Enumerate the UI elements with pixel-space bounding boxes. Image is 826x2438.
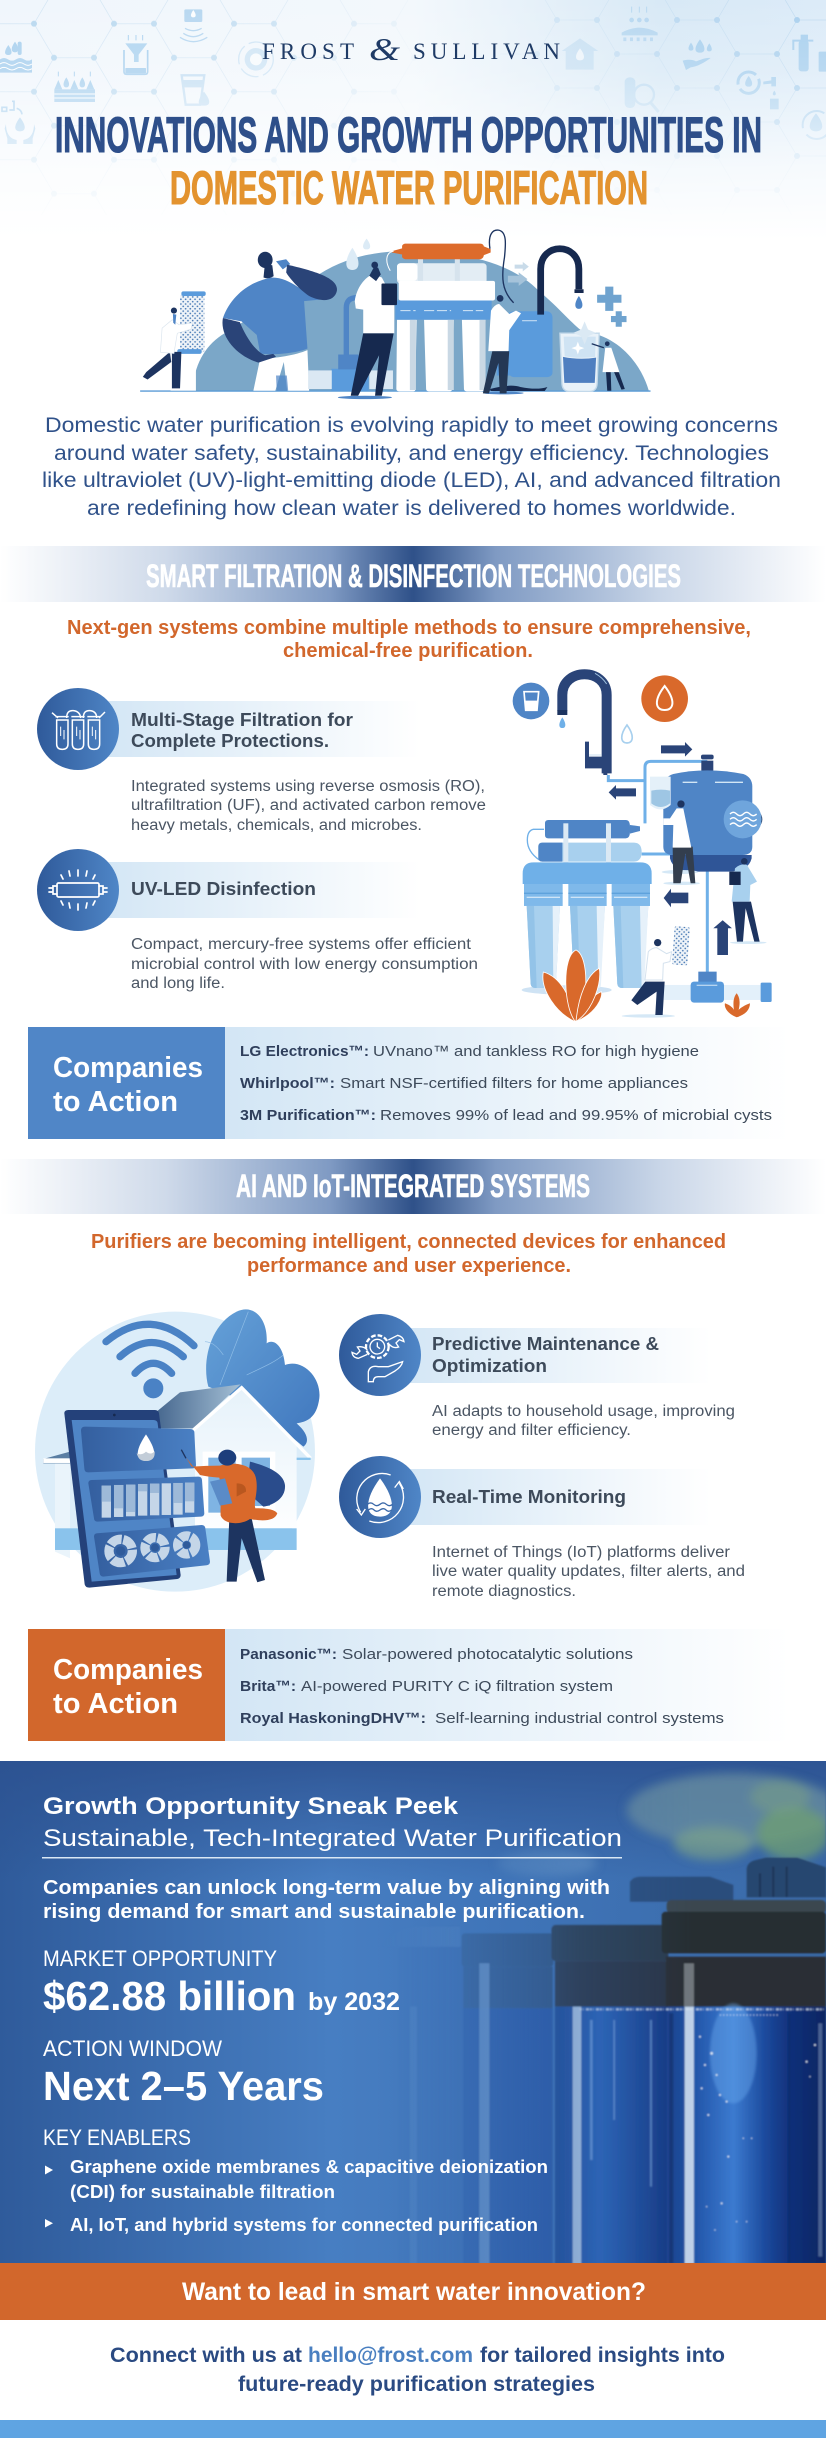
carbon filter cartridge: [171, 291, 206, 391]
scientist holding cartridge: [622, 926, 690, 1018]
glass of water: [560, 321, 599, 391]
drop badge: [641, 675, 688, 722]
feature: real-time monitoring: live water quality updates, filter alerts, and: [432, 1563, 745, 1580]
companies to action: AI and IoT: AI-powered PURITY C iQ filtration system: [301, 1678, 613, 1695]
scientist with cartridge: [143, 308, 193, 388]
house: [43, 1384, 311, 1558]
woman pointing at phone: [181, 1450, 285, 1582]
flow arrows: [609, 742, 732, 955]
hero illustration: people and water purifier: [140, 230, 651, 399]
companies to action: filtration: [28, 1027, 790, 1139]
scientist at tank: [662, 800, 700, 885]
leaf shape: [206, 1309, 320, 1447]
companies to action: filtration: UVnano™ and tankless RO for high hygiene: [373, 1043, 699, 1060]
panel heading: Growth Opportunity Sneak Peek: [43, 1793, 459, 1820]
feature: multi-stage filtration: Complete Protections.: [131, 731, 329, 751]
three-stage filter housing: [522, 862, 652, 995]
action window: Next 2–5 Years: [43, 2063, 324, 2109]
panel summary: rising demand for smart and sustainable purification.: [43, 1901, 585, 1923]
flow arrows: [508, 262, 529, 286]
front filter: [662, 1857, 826, 2264]
market opportunity: [43, 1946, 400, 2019]
panel summary: Companies can unlock long-term value by aligning with: [43, 1877, 610, 1899]
key enablers: AI, IoT, and hybrid systems for connected purification: [70, 2215, 538, 2235]
companies to action: filtration: LG Electronics™:: [240, 1043, 369, 1060]
companies to action: AI and IoT: [28, 1629, 790, 1741]
water drops: [346, 239, 370, 270]
call to action banner: Want to lead in smart water innovation?: [182, 2278, 646, 2306]
background icons: right water symbols: [562, 7, 826, 139]
feature: multi-stage filtration: Integrated systems using reverse osmosis (RO),: [131, 778, 485, 795]
feature: UV-LED disinfection: and long life.: [131, 975, 225, 992]
icon: UV lamp: [37, 849, 119, 931]
wifi symbol: [106, 1324, 194, 1393]
contact text: for tailored insights into: [480, 2344, 725, 2367]
companies to action: filtration: 3M Purification™:: [240, 1107, 376, 1124]
footer bar: [0, 2420, 826, 2438]
growth opportunity panel: [0, 1761, 826, 2267]
market opportunity: by 2032: [308, 1988, 400, 2016]
third filter: [552, 1877, 733, 2267]
action window: [43, 2036, 324, 2109]
companies to action: AI and IoT: Panasonic™:: [240, 1646, 337, 1663]
scientist with tube: [483, 295, 521, 393]
doctor with clipboard: [351, 262, 397, 396]
feature: multi-stage filtration: ultrafiltration (UF), and activated carbon remove: [131, 797, 486, 814]
feature: real-time monitoring: Real-Time Monitoring: [432, 1487, 626, 1507]
faucet and tank: [490, 249, 584, 391]
market opportunity: MARKET OPPORTUNITY: [43, 1946, 277, 1971]
companies to action: AI and IoT: Brita™:: [240, 1678, 296, 1695]
photo: water filter housings: [461, 1770, 826, 2263]
tubing: [489, 230, 514, 303]
label box: [28, 1027, 225, 1139]
panel summary: [43, 1877, 610, 1923]
subheading: purifiers: Purifiers are becoming intelligent, connected devices for enhanced: [91, 1230, 726, 1253]
key enablers: KEY ENABLERS: [43, 2125, 191, 2150]
panel heading: [42, 1793, 622, 1858]
contact text: hello@frost.com: [308, 2344, 473, 2367]
market opportunity: $62.88 billion: [43, 1973, 296, 2019]
intro paragraph: around water safety, sustainability, and energy efficiency. Technologies: [54, 441, 769, 465]
contact text: [110, 2344, 725, 2396]
intro paragraph: Domestic water purification is evolving rapidly to meet growing concerns: [45, 413, 778, 437]
purifier system illustration: [513, 673, 772, 1022]
intro paragraph: [42, 413, 781, 520]
feature: real-time monitoring: [339, 1456, 745, 1600]
feature: predictive maintenance: energy and filter efficiency.: [432, 1422, 631, 1439]
feature: multi-stage filtration: [37, 688, 486, 834]
companies to action: filtration: Whirlpool™:: [240, 1075, 335, 1092]
purifier unit with three tubes: [392, 244, 495, 391]
water pipes: [527, 761, 707, 973]
small scientist by glass: [592, 341, 625, 391]
second filter: [462, 1933, 553, 2267]
icon: gear wrench hand: [339, 1314, 421, 1396]
logo: Frost & Sullivan: &: [369, 31, 400, 67]
logo: Frost & Sullivan: FROST: [262, 39, 354, 64]
icon: filter tubes: [37, 688, 119, 770]
man drinking water: [222, 252, 337, 391]
feature: real-time monitoring: Internet of Things (IoT) platforms deliver: [432, 1544, 730, 1561]
logo: Frost & Sullivan: [262, 31, 560, 67]
label box: to Action: [53, 1688, 178, 1720]
smart home illustration: [35, 1309, 320, 1592]
label box: [28, 1629, 225, 1741]
supply boxes: [308, 355, 393, 391]
feature: UV-LED disinfection: [37, 849, 478, 992]
feature: UV-LED disinfection: UV-LED Disinfection: [131, 879, 316, 899]
feature: predictive maintenance: Predictive Maintenance &: [432, 1334, 659, 1354]
feature: predictive maintenance: AI adapts to household usage, improving: [432, 1403, 735, 1420]
feature: predictive maintenance: Optimization: [432, 1356, 547, 1376]
companies to action: AI and IoT: Royal HaskoningDHV™:: [240, 1710, 426, 1727]
section banner: AI and IoT: AI AND IoT-INTEGRATED SYSTEMS: [236, 1168, 590, 1204]
label box: Companies: [53, 1654, 203, 1686]
orange plant: [543, 950, 602, 1022]
action window: ACTION WINDOW: [43, 2036, 222, 2061]
section banner: smart filtration: [0, 546, 826, 602]
companies to action: filtration: Smart NSF-certified filters for home appliances: [340, 1075, 688, 1092]
smartphone dashboard: [64, 1410, 210, 1588]
logo: Frost & Sullivan: SULLIVAN: [413, 39, 560, 64]
key enablers: Graphene oxide membranes & capacitive deionization: [70, 2157, 548, 2177]
pump and base pipe: [663, 972, 772, 1017]
faucet: [557, 673, 632, 775]
storage tank: [650, 755, 762, 872]
water surface foam and bubbles: [580, 2009, 826, 2231]
call to action banner: [0, 2263, 826, 2320]
label box: to Action: [53, 1086, 178, 1118]
feature: multi-stage filtration: heavy metals, chemicals, and microbes.: [131, 817, 422, 834]
glass badge: [513, 683, 549, 719]
background icons: left water symbols: [0, 9, 273, 144]
contact text: Connect with us at: [110, 2344, 302, 2367]
title: [55, 107, 762, 214]
feature: real-time monitoring: remote diagnostics.: [432, 1583, 576, 1600]
label box: Companies: [53, 1052, 203, 1084]
companies to action: AI and IoT: Solar-powered photocatalytic solutions: [342, 1646, 633, 1663]
scientist with clipboard: [729, 858, 767, 944]
subheading: purifiers: [91, 1230, 726, 1277]
companies to action: AI and IoT: Self-learning industrial control systems: [435, 1710, 724, 1727]
feature: UV-LED disinfection: microbial control with low energy consumption: [131, 956, 478, 973]
subheading: next-gen systems: [67, 616, 751, 662]
companies to action: filtration: Removes 99% of lead and 99.95% of microbial cysts: [380, 1107, 772, 1124]
key enablers: (CDI) for sustainable filtration: [70, 2182, 335, 2202]
header background: [0, 0, 826, 200]
key enablers: [43, 2125, 548, 2235]
subheading: next-gen systems: chemical-free purification.: [283, 639, 533, 662]
intro paragraph: are redefining how clean water is delivered to homes worldwide.: [87, 496, 736, 520]
panel heading: Sustainable, Tech-Integrated Water Purification: [43, 1825, 622, 1852]
intro paragraph: like ultraviolet (UV)-light-emitting diode (LED), AI, and advanced filtration: [42, 468, 781, 492]
subheading: next-gen systems: Next-gen systems combine multiple methods to ensure comprehensive,: [67, 616, 751, 639]
contact text: future-ready purification strategies: [238, 2373, 595, 2396]
icon: drop with cycle arrows: [339, 1456, 421, 1538]
feature: multi-stage filtration: Multi-Stage Filtration for: [131, 710, 353, 730]
plus signs: [597, 287, 627, 327]
feature: predictive maintenance: [339, 1314, 735, 1439]
faded filter: [398, 1947, 465, 2267]
subheading: purifiers: performance and user experience.: [247, 1254, 571, 1277]
top filters: [538, 820, 642, 864]
feature: UV-LED disinfection: Compact, mercury-free systems offer efficient: [131, 936, 472, 953]
section banner: AI and IoT: [0, 1159, 826, 1214]
